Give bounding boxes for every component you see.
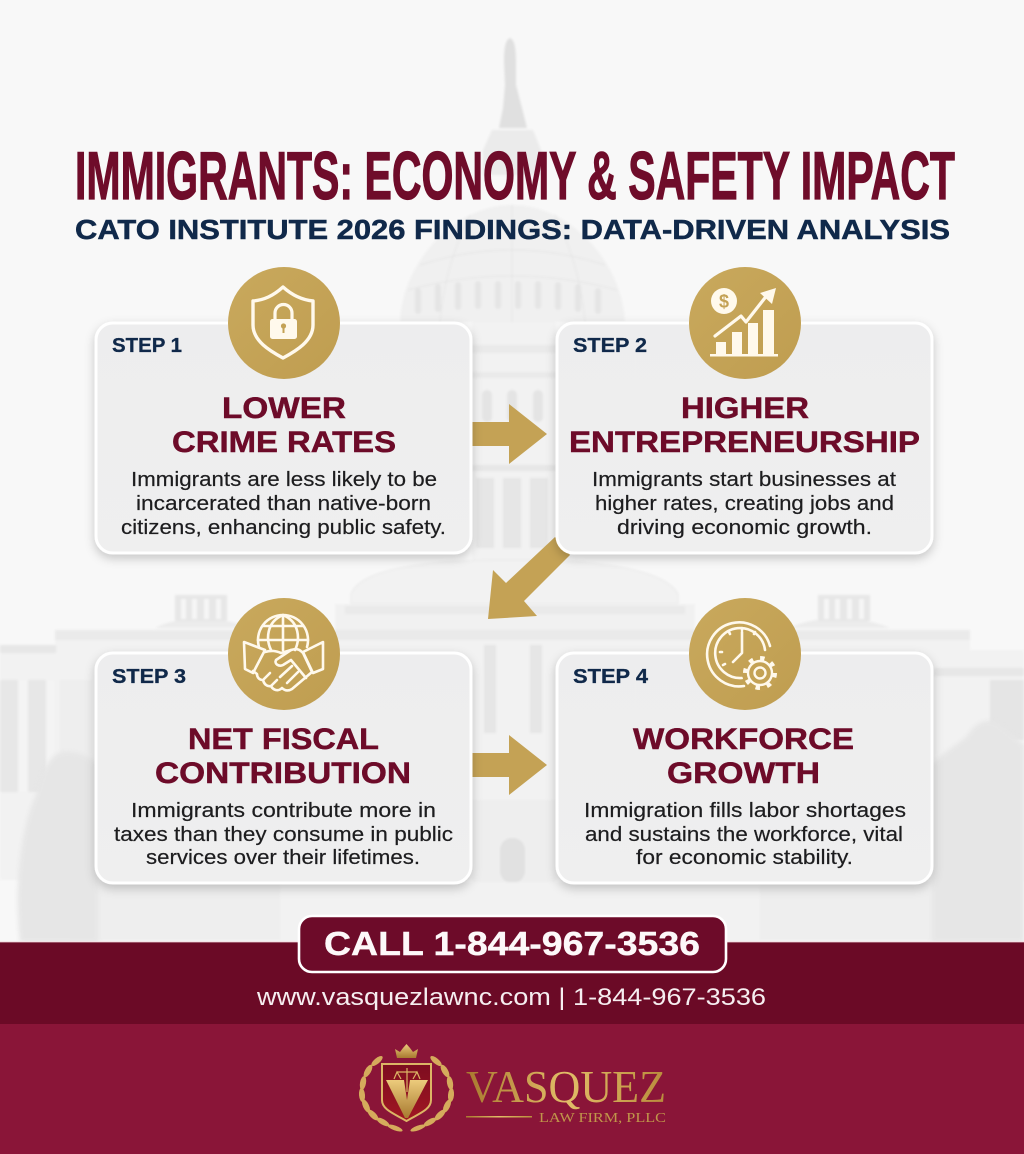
- step 1 description: Immigrants are less likely to be: [131, 468, 437, 491]
- icon: clock and gear: [689, 598, 801, 710]
- step 2 description: [592, 468, 896, 539]
- call button: [299, 916, 726, 972]
- panel: step 4 workforce growth: [557, 653, 932, 883]
- logo rule: [466, 1116, 532, 1118]
- step 1 heading: CRIME RATES: [172, 426, 396, 459]
- arrow: step 3 to step 4: [470, 735, 547, 795]
- step 4 label: STEP 4: [573, 666, 649, 688]
- panel: step 3 net fiscal contribution: [96, 653, 471, 883]
- step 1 description: [121, 468, 446, 539]
- website and phone line: www.vasquezlawnc.com | 1-844-967-3536: [256, 984, 766, 1011]
- logo laurel wreath: [358, 1054, 455, 1133]
- step 4 heading: WORKFORCE: [633, 723, 854, 756]
- panel: step 2 higher entrepreneurship: [557, 323, 932, 553]
- icon: growth chart with dollar coin: [689, 267, 801, 379]
- logo V and scales: [386, 1080, 428, 1118]
- step 1 description: citizens, enhancing public safety.: [121, 516, 446, 539]
- icon: growth chart with dollar coin: $: [719, 292, 729, 312]
- footer band: [0, 1024, 1024, 1154]
- arrow: step 2 to step 3: [488, 537, 570, 619]
- logo: Vasquez Law Firm: [358, 1044, 666, 1133]
- icon: shield with padlock: [228, 267, 340, 379]
- step 4 description: for economic stability.: [636, 846, 853, 869]
- step 4 heading: GROWTH: [667, 757, 820, 790]
- step 3 description: services over their lifetimes.: [146, 846, 420, 869]
- step 4 description: [584, 799, 906, 869]
- logo shield: [382, 1064, 431, 1121]
- panel: step 1 lower crime rates: [96, 323, 471, 553]
- step 2 description: Immigrants start businesses at: [592, 468, 896, 491]
- step 3 heading: NET FISCAL: [188, 723, 379, 756]
- icon: globe and handshake: [228, 598, 340, 710]
- step 1 description: incarcerated than native-born: [136, 492, 431, 515]
- step 3 heading: [155, 723, 411, 790]
- step 4 description: Immigration fills labor shortages: [584, 799, 906, 822]
- call button: CALL 1-844-967-3536: [324, 925, 700, 962]
- arrow: step 1 to step 2: [470, 404, 547, 464]
- step 2 label: STEP 2: [573, 335, 647, 357]
- contact band: [0, 941, 1024, 1024]
- step 3 heading: CONTRIBUTION: [155, 757, 411, 790]
- subtitle: CATO INSTITUTE 2026 FINDINGS: DATA-DRIVEN ANALYSIS: [75, 214, 950, 245]
- step 3 description: [114, 799, 453, 869]
- step 1 heading: [172, 392, 396, 459]
- logo crown: [395, 1044, 418, 1058]
- step 2 heading: HIGHER: [681, 392, 809, 425]
- logo wordmark: VASQUEZ: [466, 1062, 666, 1112]
- step 1 label: STEP 1: [112, 335, 182, 357]
- step 3 label: STEP 3: [112, 666, 186, 688]
- step 4 description: and sustains the workforce, vital: [585, 823, 903, 846]
- logo tagline: LAW FIRM, PLLC: [539, 1111, 666, 1126]
- step 4 heading: [633, 723, 854, 790]
- step 3 description: Immigrants contribute more in: [131, 799, 436, 822]
- step 1 heading: LOWER: [222, 392, 346, 425]
- step 2 heading: [569, 392, 920, 459]
- step 2 heading: ENTREPRENEURSHIP: [569, 426, 920, 459]
- step 2 description: higher rates, creating jobs and: [595, 492, 894, 515]
- step 3 description: taxes than they consume in public: [114, 823, 453, 846]
- step 2 description: driving economic growth.: [617, 516, 872, 539]
